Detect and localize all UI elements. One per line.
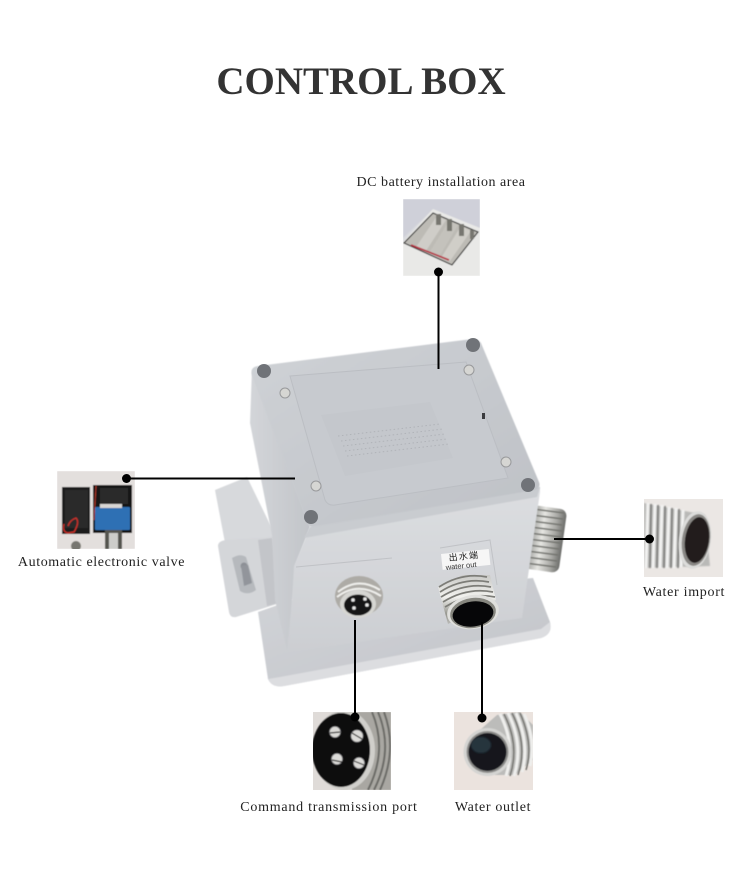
thumbnail: water import bbox=[644, 499, 723, 577]
label: automatic electronic valve: Automatic electronic valve bbox=[18, 555, 185, 570]
cover screws bbox=[280, 365, 511, 491]
box top face bbox=[252, 339, 540, 527]
thumbnail: water outlet bbox=[454, 712, 533, 790]
thumbnail: command transmission port bbox=[312, 710, 391, 790]
corner holes bbox=[257, 338, 535, 524]
box front side bbox=[289, 487, 540, 652]
water out sticker: 出水端 bbox=[448, 548, 480, 564]
water out sticker: water out bbox=[444, 560, 478, 572]
box left side bbox=[250, 369, 310, 650]
callout line: water import bbox=[554, 534, 654, 544]
mounting plate bbox=[215, 477, 551, 686]
water outlet connector bbox=[438, 575, 501, 632]
thumbnail: battery compartment bbox=[403, 199, 480, 276]
rear water import fitting bbox=[523, 505, 567, 573]
battery cover panel bbox=[290, 362, 508, 505]
cover slot bbox=[482, 413, 485, 419]
label: DC battery installation area: DC battery installation area bbox=[357, 175, 526, 190]
cover embossed area bbox=[321, 402, 453, 476]
callout line: battery bbox=[434, 268, 443, 369]
front seam bbox=[296, 540, 497, 585]
thumbnail: automatic electronic valve bbox=[57, 471, 135, 551]
title: CONTROL BOX bbox=[216, 60, 506, 103]
water out sticker bbox=[441, 548, 490, 572]
label: water outlet: Water outlet bbox=[455, 800, 531, 815]
callout line: command transmission port bbox=[350, 620, 360, 722]
product: control box bbox=[215, 338, 567, 686]
command port connector bbox=[335, 576, 383, 618]
label: water import: Water import bbox=[643, 585, 725, 600]
label: command transmission port: Command transmission port bbox=[240, 800, 418, 815]
callout line: water outlet bbox=[478, 622, 486, 722]
box lid lip bbox=[304, 487, 540, 538]
callout line: automatic electronic valve bbox=[122, 474, 295, 483]
